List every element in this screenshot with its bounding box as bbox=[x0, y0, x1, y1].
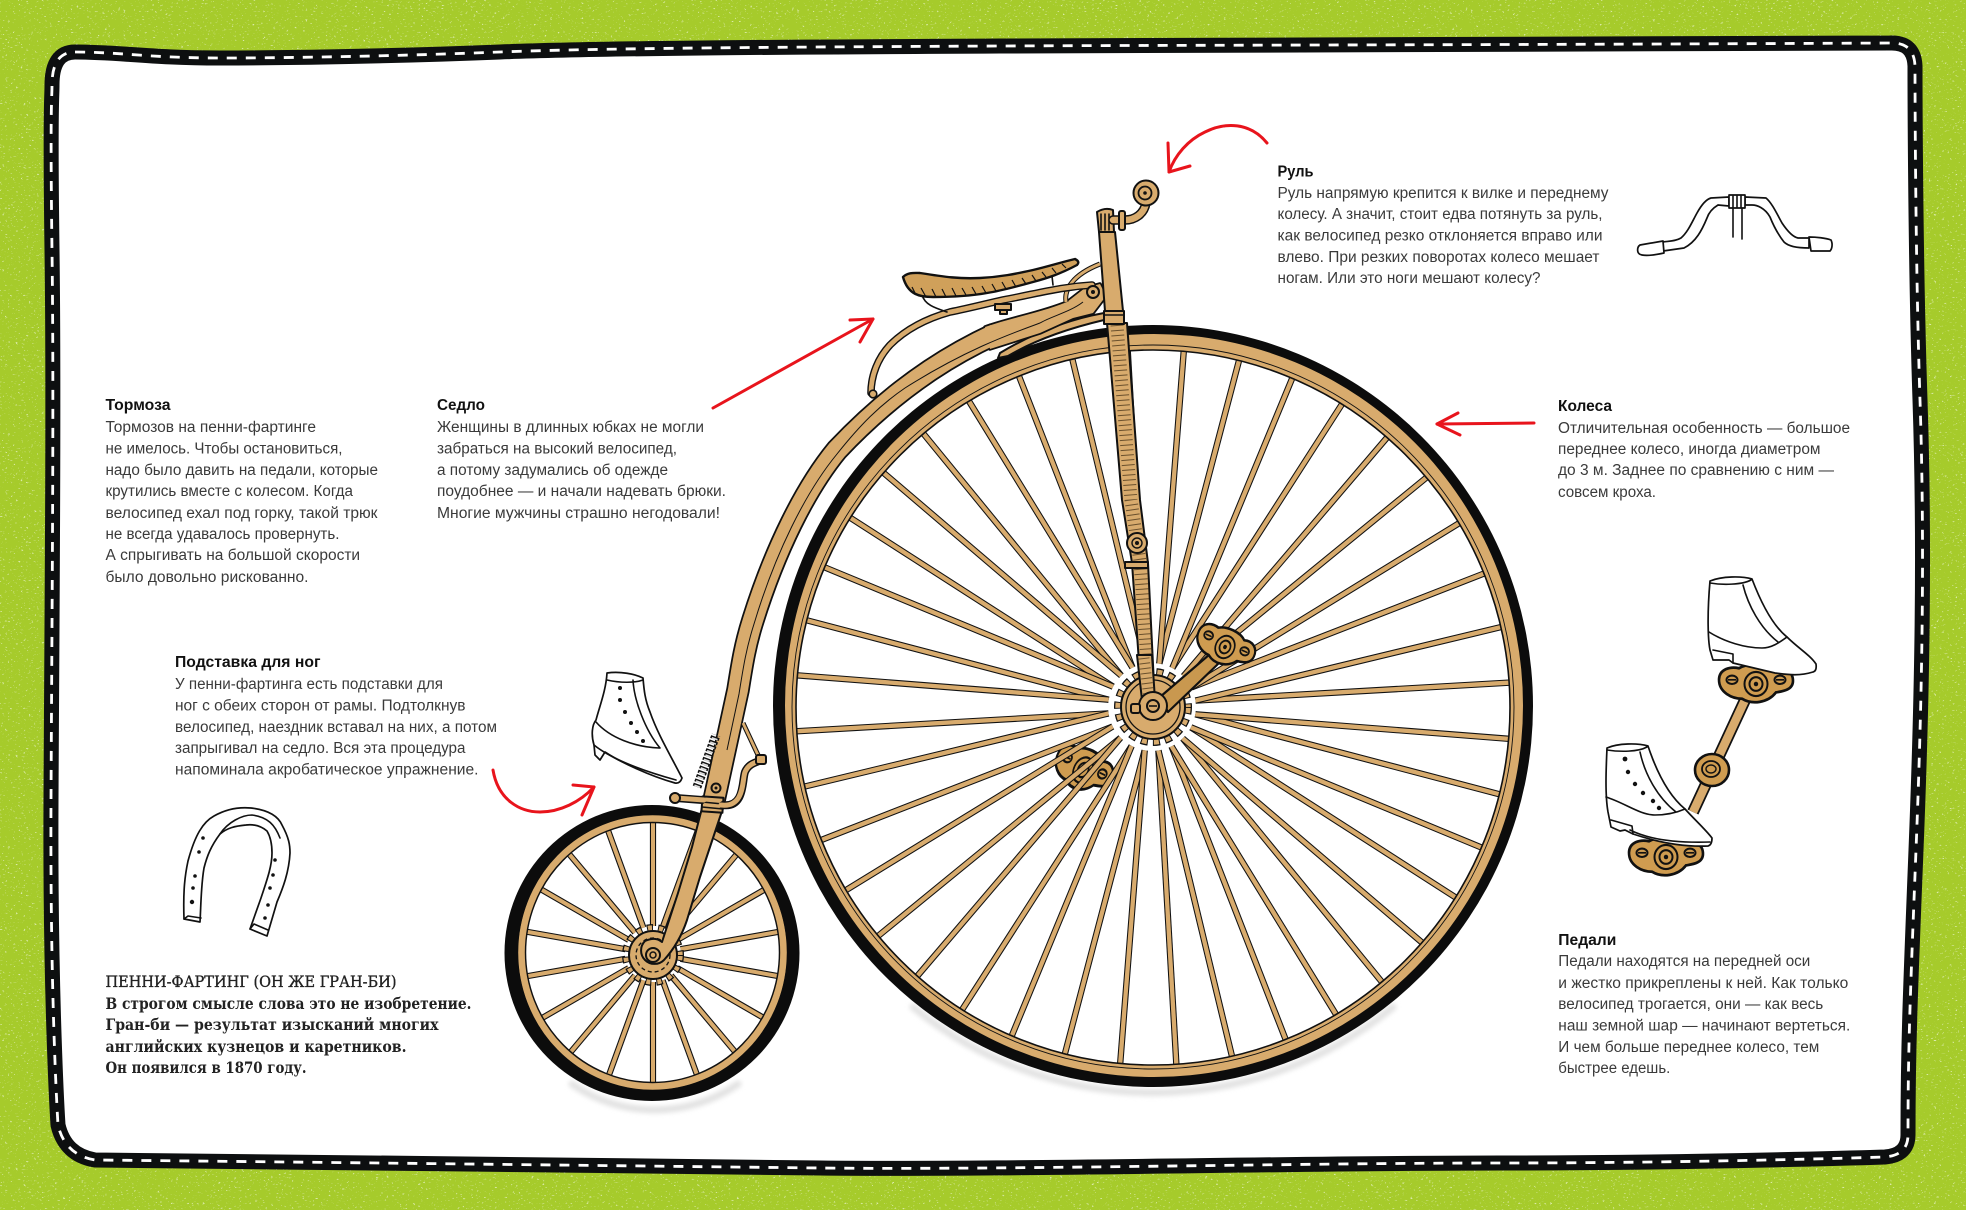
lower pedal bbox=[1629, 837, 1703, 875]
hub and crank bbox=[1118, 618, 1260, 742]
text: brakes: было довольно рискованно. bbox=[106, 569, 308, 586]
text: pedals: быстрее едешь. bbox=[1558, 1060, 1670, 1077]
text: foot rest: запрыгивал на седло. Вся эта процедура bbox=[175, 740, 466, 757]
wheel shadow bbox=[572, 1007, 1393, 1110]
mudguard brace bbox=[998, 313, 1104, 358]
text: brakes: велосипед ехал под горку, такой трюк bbox=[106, 505, 378, 522]
text: brakes: не всегда удавалось провернуть. bbox=[106, 526, 340, 543]
text: wheels: Отличительная особенность — большое bbox=[1558, 420, 1850, 437]
text: handlebar: влево. При резких поворотах колесо мешает bbox=[1278, 249, 1600, 266]
text: wheels: переднее колесо, иногда диаметром bbox=[1558, 441, 1820, 458]
large front wheel spokes bbox=[785, 340, 1519, 1074]
text: pedals: наш земной шар — начинают вертеться. bbox=[1558, 1018, 1850, 1034]
saddle bbox=[903, 259, 1078, 297]
text: penny-farthing intro bbox=[106, 973, 472, 1077]
text: foot rest: У пенни-фартинга есть подставки для bbox=[175, 676, 443, 693]
text: brakes bbox=[106, 397, 378, 586]
text: wheels bbox=[1558, 398, 1850, 501]
text: pedals: велосипед трогается, они — как весь bbox=[1558, 996, 1823, 1013]
coil spring bbox=[697, 735, 716, 787]
fork clamp bbox=[1125, 533, 1148, 568]
rear hub bbox=[626, 928, 680, 982]
text: pedals: Педали находятся на передней оси bbox=[1558, 953, 1810, 970]
text: brakes: не имелось. Чтобы остановиться, bbox=[106, 440, 342, 458]
big front pedal behind spokes bbox=[1048, 738, 1119, 801]
text: foot rest: велосипед, наездник вставал на них, а потом bbox=[175, 719, 497, 736]
text: handlebar: как велосипед резко отклоняется вправо или bbox=[1278, 228, 1602, 244]
handlebar bell end bbox=[1113, 180, 1158, 230]
text: brakes: крутились вместе с колесом. Когда bbox=[106, 483, 353, 500]
text: saddle bbox=[437, 397, 726, 522]
text: brakes: Тормоза bbox=[106, 397, 171, 414]
text: wheels: до 3 м. Заднее по сравнению с ним — bbox=[1558, 462, 1834, 479]
steering column and ribbed fork bbox=[1097, 209, 1155, 705]
saddle spring bbox=[869, 264, 1100, 398]
text: foot rest: ног с обеих сторон от рамы. Подтолкнув bbox=[175, 698, 466, 714]
text: penny-farthing intro: В строгом смысле слова это не изобретение. bbox=[106, 994, 472, 1013]
text: pedals: Педали bbox=[1558, 932, 1616, 949]
text: saddle: поудобнее — и начали надевать брюки. bbox=[437, 483, 726, 500]
text: brakes: Тормозов на пенни-фартинге bbox=[106, 419, 316, 436]
text: wheels: Колеса bbox=[1558, 398, 1612, 415]
illustration: penny-farthing bicycle bbox=[504, 180, 1533, 1110]
upper boot bbox=[1708, 577, 1816, 675]
text: penny-farthing intro: английских кузнецов и каретников. bbox=[106, 1037, 406, 1056]
text: saddle: Женщины в длинных юбках не могли bbox=[437, 419, 704, 436]
icon: handlebar sketch bbox=[1638, 195, 1832, 255]
crank knob bbox=[1695, 754, 1729, 786]
text: foot rest bbox=[175, 654, 497, 778]
crank arm bbox=[1693, 700, 1745, 812]
icon: foot rest stirrup bbox=[184, 808, 290, 936]
text: saddle: Многие мужчины страшно негодовали! bbox=[437, 505, 720, 522]
text: penny-farthing intro: Он появился в 1870 году. bbox=[106, 1058, 306, 1077]
text: saddle: а потому задумались об одежде bbox=[437, 462, 668, 479]
frame backbone bbox=[641, 284, 1106, 964]
text: foot rest: напоминала акробатическое упражнение. bbox=[175, 762, 479, 778]
text: pedals: И чем больше переднее колесо, тем bbox=[1558, 1039, 1819, 1056]
fork collar bbox=[701, 796, 723, 813]
text: handlebar: Руль bbox=[1278, 164, 1314, 180]
text: penny-farthing intro: ПЕННИ-ФАРТИНГ (ОН ЖЕ ГРАН-БИ) bbox=[106, 973, 396, 991]
text: brakes: надо было давить на педали, которые bbox=[106, 462, 378, 479]
arrow: handlebar bbox=[1168, 126, 1267, 172]
text: handlebar bbox=[1278, 164, 1609, 287]
text: saddle: Седло bbox=[437, 397, 485, 414]
icon: pedals with crank and boots bbox=[1606, 577, 1816, 875]
upper pedal bbox=[1719, 664, 1793, 702]
text: penny-farthing intro: Гран-би — результат изысканий многих bbox=[106, 1015, 439, 1034]
lower boot bbox=[1606, 744, 1712, 846]
text: saddle: забраться на высокий велосипед, bbox=[437, 440, 677, 458]
icon: boot on foot rest bbox=[592, 672, 682, 783]
arc above pivot bbox=[1066, 264, 1100, 302]
text: brakes: А спрыгивать на большой скорости bbox=[106, 547, 360, 564]
text: handlebar: колесу. А значит, стоит едва потянуть за руль, bbox=[1278, 206, 1602, 223]
arrow: wheel bbox=[1437, 413, 1534, 435]
arrow: saddle bbox=[713, 319, 873, 408]
text: handlebar: ногам. Или это ноги мешают колесу? bbox=[1278, 270, 1541, 287]
text: foot rest: Подставка для ног bbox=[175, 654, 321, 671]
small rear wheel bbox=[504, 805, 800, 1101]
rear fork blade bbox=[641, 808, 723, 964]
text: pedals: и жестко прикреплены к ней. Как только bbox=[1558, 975, 1848, 992]
foot rest and spring bbox=[670, 723, 766, 805]
text: pedals bbox=[1558, 932, 1850, 1077]
large front wheel rim and tyre bbox=[773, 325, 1533, 1087]
text: handlebar: Руль напрямую крепится к вилке и переднему bbox=[1278, 185, 1609, 202]
text: wheels: совсем кроха. bbox=[1558, 484, 1656, 501]
arrow: foot rest bbox=[493, 770, 594, 815]
